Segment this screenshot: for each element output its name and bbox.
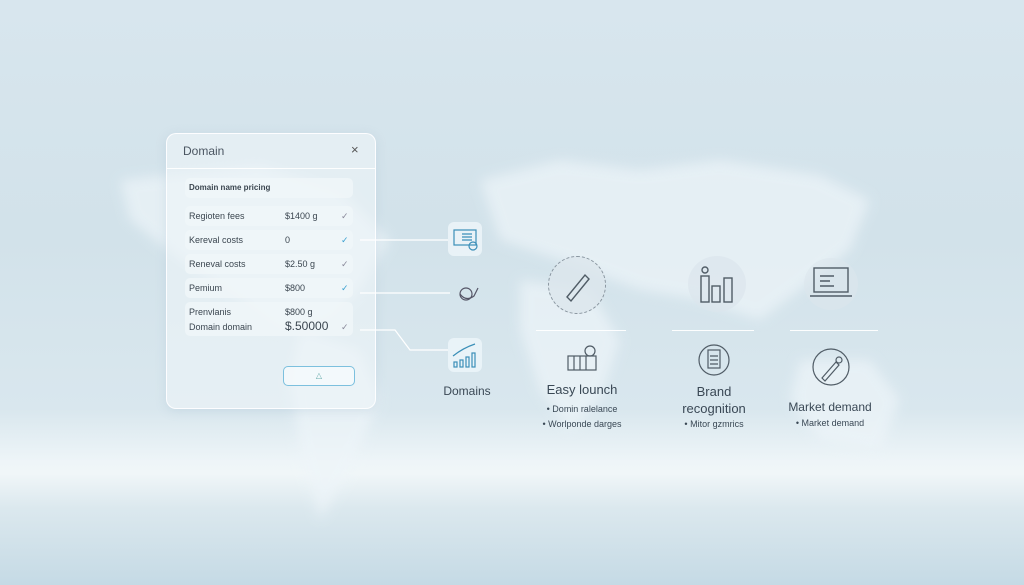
pricing rows: Pemium [189, 283, 222, 293]
pricing rows: Kereval costs [189, 235, 243, 245]
icon: bar chart [688, 256, 746, 312]
column separators [536, 330, 626, 331]
label: Domains: Domains [443, 384, 491, 398]
pricing rows: $2.50 g [285, 259, 315, 269]
pricing rows: ✓ [341, 211, 349, 221]
column: Brand recognition: recognition [682, 401, 746, 416]
button: △ [316, 371, 322, 380]
panel header: Domain [183, 144, 224, 158]
pricing rows: $.50000 [285, 319, 328, 333]
subheading: Domain name pricing [189, 183, 270, 192]
column: Market demand: Market demand [788, 400, 872, 414]
pricing rows: $800 g [285, 307, 313, 317]
icon: chart [448, 338, 482, 372]
pricing rows: ✓ [341, 235, 349, 245]
icon: pen circle [548, 256, 606, 314]
subheading [185, 178, 353, 198]
pricing rows: Reneval costs [189, 259, 246, 269]
pricing rows: ✓ [341, 259, 349, 269]
icon: microphone circle [812, 348, 850, 386]
column: Easy lounch: • Worlponde darges [542, 419, 622, 429]
column: Market demand: • Market demand [796, 418, 864, 428]
pricing rows: ✓ [341, 283, 349, 293]
pricing rows [185, 211, 353, 336]
column: Brand recognition [682, 344, 746, 429]
pricing rows: 0 [285, 235, 290, 245]
icon: certificate [448, 222, 482, 256]
pricing rows: ✓ [341, 322, 349, 332]
pricing rows: Regioten fees [189, 211, 245, 221]
column: Easy lounch: Easy lounch [547, 382, 617, 397]
panel: domain pricing [166, 133, 376, 409]
pricing rows: $800 [285, 283, 305, 293]
column: Market demand [788, 348, 872, 428]
icon: document circle [698, 344, 730, 376]
column: Easy lounch [542, 345, 622, 429]
close icon: × [351, 142, 359, 157]
icon: laptop [804, 258, 858, 310]
column: Brand recognition: • Mitor gzmrics [684, 419, 744, 429]
icon: hand/globe [459, 287, 478, 301]
icon: calendar [567, 345, 597, 371]
column: Easy lounch: • Domin ralelance [547, 404, 617, 414]
pricing rows: Prenvlanis [189, 307, 231, 317]
pricing rows: $1400 g [285, 211, 318, 221]
button [283, 366, 355, 386]
pricing rows: Domain domain [189, 322, 252, 332]
column: Brand recognition: Brand [697, 384, 731, 399]
